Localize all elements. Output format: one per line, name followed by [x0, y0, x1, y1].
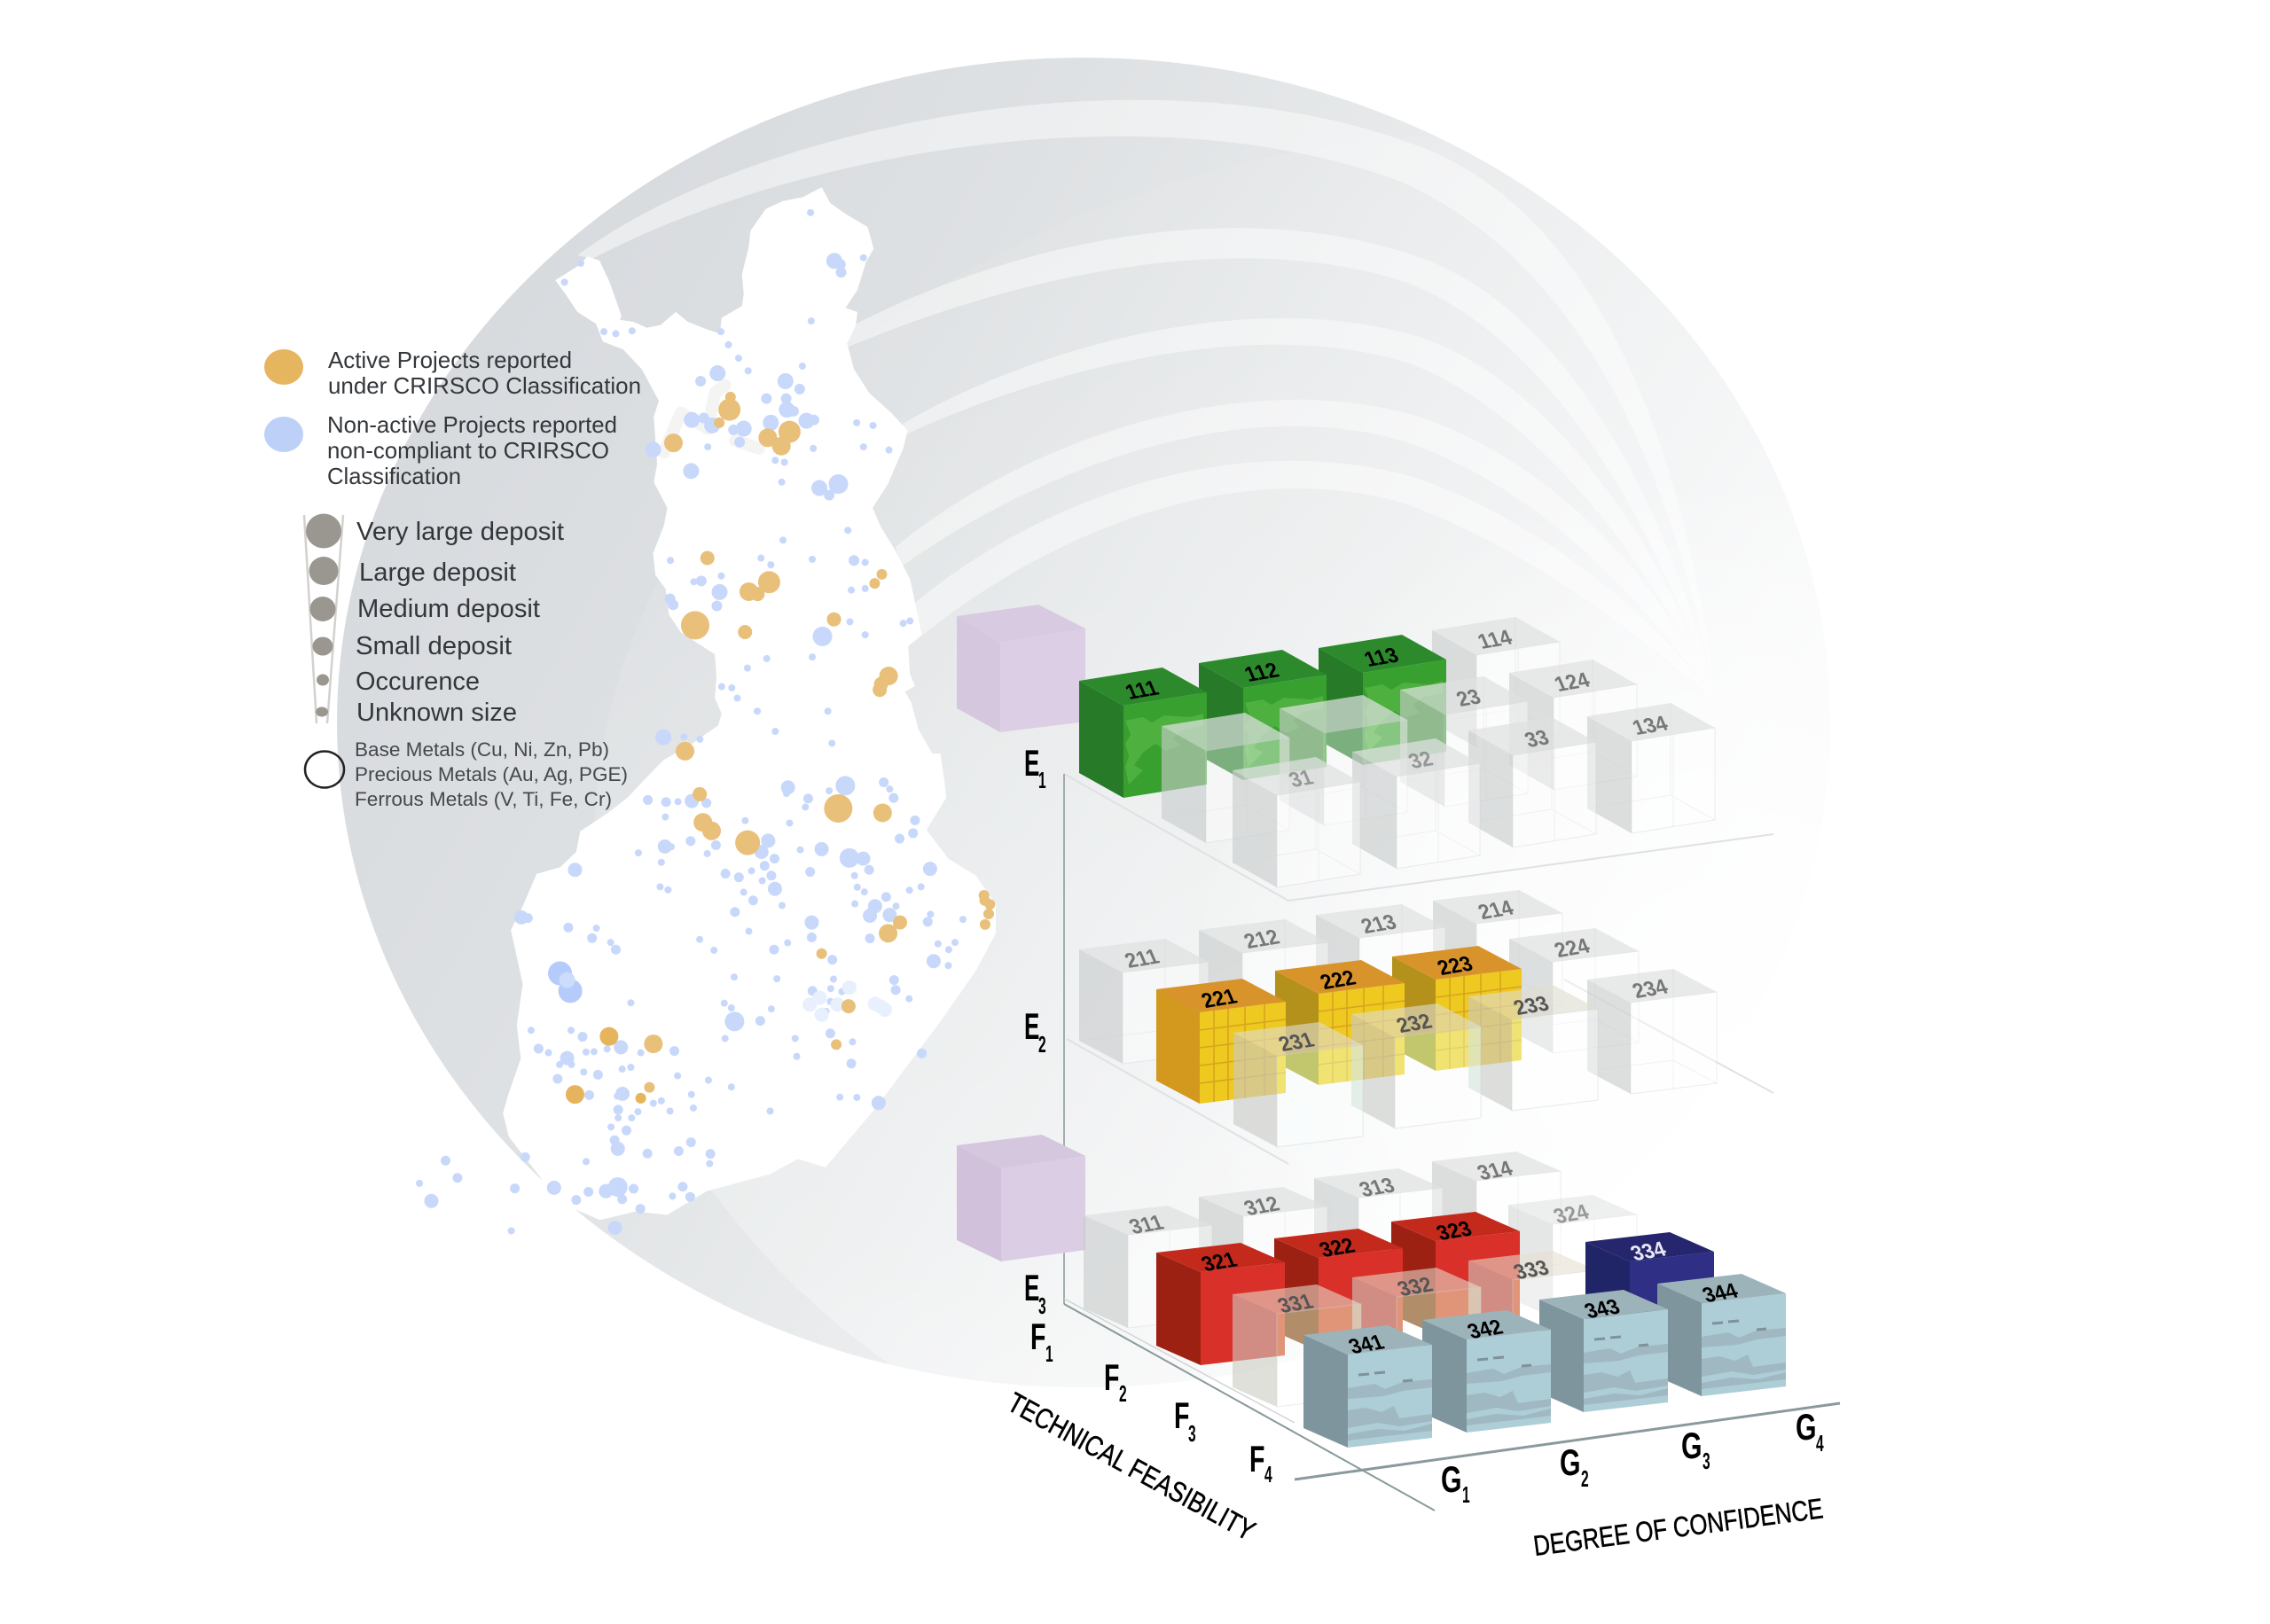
axis labels G: 3: [1702, 1448, 1710, 1474]
active projects text: under CRIRSCO Classification: [328, 372, 641, 399]
legend: metal groups: [305, 738, 628, 810]
block 232: [1351, 1003, 1481, 1128]
active projects text: Active Projects reported: [328, 347, 572, 373]
block 224: [1509, 928, 1639, 1053]
axis labels G: G: [1681, 1425, 1702, 1466]
axis labels E: 2: [1038, 1032, 1046, 1058]
axis labels F: 1: [1045, 1341, 1053, 1367]
block 331: [1233, 1284, 1361, 1407]
axis labels G: 2: [1581, 1466, 1589, 1492]
axis labels E: E: [1024, 743, 1039, 785]
project dots north: [565, 213, 910, 751]
block 321: [1156, 1243, 1285, 1365]
axis title: degree of confidence: DEGREE OF CONFIDENCE: [1531, 1492, 1825, 1562]
block 323: [1391, 1212, 1520, 1334]
block 313: [1314, 1168, 1443, 1291]
block 343: 343: [1581, 1296, 1624, 1323]
axis labels E: E: [1024, 1006, 1039, 1048]
block 344: 344: [1699, 1280, 1742, 1308]
legend: deposit sizes: Unknown size: [356, 699, 517, 727]
block 224: 224: [1551, 935, 1594, 963]
block 134: [1587, 703, 1715, 833]
block 342: 342: [1464, 1316, 1507, 1344]
block 331: 331: [1274, 1291, 1317, 1318]
axis title: technical feasibility: TECHNICAL FEASIBILITY: [1003, 1386, 1261, 1547]
axis labels E: 1: [1038, 768, 1046, 793]
axis labels G: G: [1441, 1458, 1462, 1500]
block 131: 31: [1286, 767, 1317, 792]
block 133: [1468, 717, 1596, 847]
axis labels E: E: [1024, 1268, 1039, 1309]
non-active projects text: [327, 411, 617, 489]
non-active projects text: non-compliant to CRIRSCO: [327, 437, 609, 464]
block 343: [1539, 1290, 1668, 1412]
block 122: [1280, 695, 1407, 825]
block 314: [1432, 1152, 1561, 1274]
block 114: [1432, 617, 1560, 747]
icon: active projects dot: [264, 349, 303, 385]
block 124: [1509, 660, 1637, 790]
legend: deposit sizes: Occurence: [356, 668, 480, 696]
block 222: 222: [1317, 967, 1359, 995]
block 214: 214: [1475, 897, 1518, 925]
legend: metal groups: Ferrous Metals (V, Ti, Fe, Cr): [355, 788, 612, 810]
block 323: 323: [1433, 1218, 1476, 1245]
block 314: 314: [1474, 1158, 1517, 1185]
block 322: [1274, 1229, 1403, 1351]
block 133: 33: [1522, 727, 1553, 753]
axis labels F: [1030, 1315, 1272, 1487]
block 334: [1585, 1232, 1714, 1355]
map of Finland: [419, 187, 996, 1230]
axis labels F: F: [1249, 1437, 1264, 1480]
block 232: 232: [1393, 1011, 1436, 1038]
legend: metal groups: Base Metals (Cu, Ni, Zn, Pb): [355, 738, 609, 761]
block 214: [1433, 890, 1562, 1015]
block 324: [1508, 1195, 1637, 1317]
project dots south: [419, 783, 990, 1230]
block 341: [1303, 1325, 1432, 1448]
axis labels F: F: [1174, 1394, 1189, 1436]
purple cuboid E1: [957, 605, 1085, 732]
block 212: [1199, 919, 1328, 1044]
legend: metal groups: Precious Metals (Au, Ag, PGE): [355, 763, 628, 785]
block 231: 231: [1275, 1029, 1318, 1057]
block 113: 113: [1361, 644, 1402, 672]
block 221: 221: [1198, 986, 1241, 1013]
block 333: 333: [1510, 1257, 1553, 1284]
block 233: 233: [1510, 993, 1553, 1020]
block 311: 311: [1126, 1212, 1167, 1239]
axis labels F: F: [1030, 1315, 1045, 1357]
block 313: 313: [1356, 1175, 1398, 1202]
block 211: [1079, 939, 1209, 1064]
block 221: [1156, 979, 1286, 1104]
block 333: [1468, 1251, 1597, 1373]
axis labels F: 4: [1264, 1462, 1272, 1487]
block 234: 234: [1629, 976, 1672, 1003]
block 113: [1319, 635, 1446, 765]
legend: deposit sizes: Medium deposit: [357, 595, 540, 623]
block 123: [1400, 676, 1528, 807]
non-active projects text: Classification: [327, 463, 461, 489]
block 121: [1162, 713, 1289, 843]
axis labels E: [1024, 743, 1046, 1319]
block 231: [1233, 1022, 1363, 1147]
block 131: [1233, 757, 1360, 887]
block 342: [1422, 1310, 1551, 1433]
block 212: 212: [1241, 926, 1283, 954]
block 233: [1468, 986, 1598, 1111]
icon: non-active projects dot: [264, 417, 303, 452]
axis labels G: 4: [1816, 1431, 1824, 1456]
block 111: 111: [1122, 677, 1162, 705]
block 132: 32: [1405, 748, 1436, 774]
block 321: 321: [1198, 1249, 1241, 1277]
axis labels E: 3: [1038, 1293, 1046, 1319]
block 114: 114: [1475, 627, 1516, 654]
legend: deposit sizes: [304, 514, 564, 727]
block 222: [1275, 960, 1405, 1085]
level E1 blocks: [1079, 617, 1715, 887]
block 324: 324: [1550, 1201, 1593, 1229]
block 124: 124: [1551, 669, 1594, 697]
block 332: [1352, 1268, 1481, 1390]
block 123: 23: [1453, 686, 1484, 712]
block 223: 223: [1434, 953, 1476, 980]
legend: deposit sizes: Large deposit: [359, 558, 516, 587]
legend: deposit sizes: Very large deposit: [356, 518, 564, 546]
legend: project status: [264, 347, 641, 489]
block 234: [1587, 969, 1717, 1094]
block 312: 312: [1241, 1193, 1283, 1221]
axis labels G: [1441, 1406, 1824, 1508]
block 322: 322: [1316, 1235, 1358, 1262]
background globe: [337, 58, 1793, 1387]
axis labels F: 3: [1188, 1421, 1196, 1447]
axis labels F: 2: [1119, 1381, 1127, 1407]
non-active projects text: Non-active Projects reported: [327, 411, 617, 438]
block 332: 332: [1394, 1274, 1436, 1301]
block 223: [1392, 946, 1522, 1071]
axis labels G: 1: [1462, 1482, 1470, 1508]
block 213: 213: [1358, 911, 1400, 939]
block 134: 134: [1629, 713, 1672, 740]
axis labels G: G: [1796, 1406, 1817, 1448]
block 341: 341: [1345, 1331, 1388, 1359]
block 111: [1079, 668, 1207, 798]
level E2 blocks: [1079, 890, 1717, 1147]
axis labels F: F: [1104, 1355, 1119, 1398]
block 312: [1199, 1187, 1327, 1309]
block 132: [1352, 738, 1480, 869]
block 334: 334: [1627, 1238, 1671, 1266]
block 112: 112: [1241, 660, 1282, 687]
block 112: [1199, 650, 1327, 780]
block 213: [1316, 904, 1445, 1029]
active projects text: [328, 347, 641, 399]
block 211: 211: [1122, 946, 1162, 973]
level E3 blocks: [1084, 1152, 1786, 1448]
block 344: [1657, 1274, 1786, 1396]
legend: deposit sizes: Small deposit: [356, 632, 512, 660]
axis labels G: G: [1560, 1441, 1581, 1483]
axes and level floors: [1064, 774, 1840, 1511]
purple cuboid E3: [957, 1135, 1085, 1261]
block 311: [1084, 1206, 1212, 1328]
